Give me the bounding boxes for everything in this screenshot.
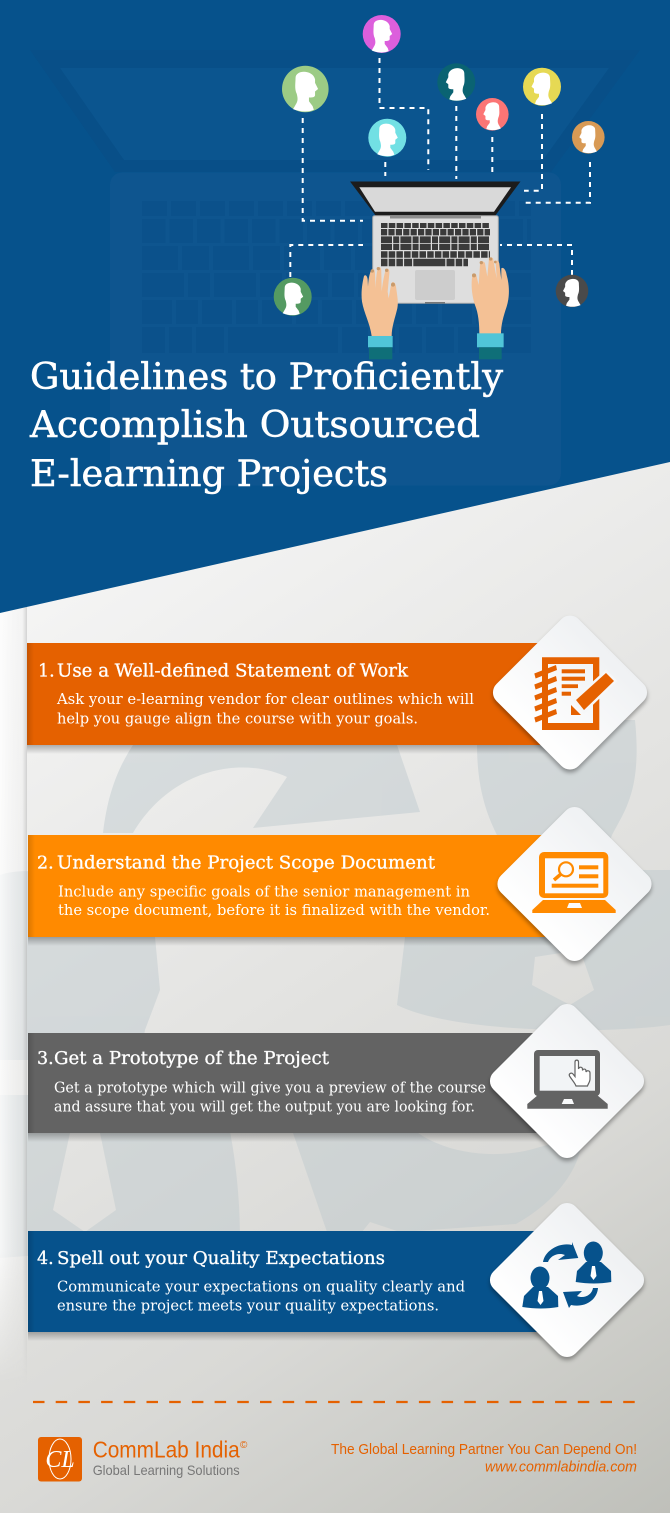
step 3 heading: Get a Prototype of the Project [54, 1049, 329, 1069]
icon: notepad and pencil [534, 657, 614, 730]
diamond badge 2 [492, 802, 657, 969]
logo wordmark: © [240, 1440, 248, 1451]
logo mark: CL [45, 1447, 75, 1473]
panel: step 4 quality expectations [28, 1231, 560, 1341]
diamond badge 1 [488, 610, 652, 778]
laptop illustration [350, 182, 520, 304]
icon: people exchange [522, 1242, 611, 1308]
footer tagline: The Global Learning Partner You Can Depend On! [331, 1442, 637, 1458]
avatar: dark green [274, 278, 312, 316]
step 2 text: the scope document, before it is finalized with the vendor. [58, 901, 490, 919]
dashed connector lines [290, 58, 590, 277]
avatar: salmon [476, 98, 509, 131]
step 3 heading: 3. [37, 1049, 54, 1069]
logo wordmark: Global Learning Solutions [93, 1462, 240, 1478]
step 3 text [54, 1079, 486, 1116]
logo wordmark: CommLab India [93, 1437, 240, 1463]
step 3 text: and assure that you will get the output you are looking for. [54, 1098, 475, 1116]
avatar: light green [282, 66, 329, 112]
step 3 text: Get a prototype which will give you a preview of the course [54, 1079, 486, 1097]
footer logo [38, 1437, 248, 1482]
avatar: orange [572, 121, 605, 154]
icon: laptop with hand cursor [527, 1050, 608, 1109]
footer divider [33, 1401, 637, 1403]
footer tagline: www.commlabindia.com [485, 1460, 637, 1476]
icon: left hand [362, 267, 398, 359]
logo mark [38, 1437, 82, 1482]
panel: step 1 statement of work [27, 643, 560, 754]
footer tagline [331, 1442, 637, 1476]
step 1 text: Ask your e-learning vendor for clear outlines which will [56, 690, 474, 708]
step 4 text: ensure the project meets your quality expectations. [57, 1297, 439, 1315]
step 4 heading: 4. [37, 1249, 54, 1269]
panel: step 3 prototype [28, 1033, 560, 1142]
step 2 heading: 2. [37, 853, 54, 873]
avatar: dark grey [556, 275, 588, 307]
step 4 text [57, 1278, 465, 1315]
step 1 heading: 1. [38, 662, 55, 682]
step 2 heading: Understand the Project Scope Document [57, 853, 435, 873]
ghost laptop in header [30, 50, 640, 486]
step 2 text [58, 883, 490, 919]
avatar: dark teal [437, 63, 475, 101]
avatar: cyan [368, 119, 406, 157]
left margin strip [0, 600, 27, 1385]
title [29, 357, 504, 495]
step 1 text: help you gauge align the course with your goals. [57, 709, 418, 727]
avatar: magenta [363, 15, 401, 53]
step 1 heading: Use a Well-defined Statement of Work [57, 662, 408, 682]
diamond badge 4 [485, 1198, 649, 1365]
title: Guidelines to Proficiently [30, 357, 504, 398]
ghost silhouettes background [0, 720, 670, 1258]
step 4 heading: Spell out your Quality Expectations [57, 1249, 385, 1269]
title: E-learning Projects [30, 454, 388, 495]
hands on keyboard [362, 257, 509, 359]
step 4 text: Communicate your expectations on quality clearly and [57, 1278, 465, 1296]
icon: laptop with document search [532, 852, 616, 913]
user avatars network [274, 15, 605, 316]
blue header panel [0, 0, 670, 613]
step 1 text [56, 690, 474, 727]
panel: step 2 project scope [28, 835, 560, 946]
icon: right hand [472, 257, 509, 359]
diamond badge 3 [485, 999, 649, 1166]
title: Accomplish Outsourced [29, 405, 480, 446]
step 2 text: Include any specific goals of the senior management in [58, 883, 470, 901]
logo wordmark [93, 1437, 248, 1478]
avatar: yellow [523, 68, 561, 106]
